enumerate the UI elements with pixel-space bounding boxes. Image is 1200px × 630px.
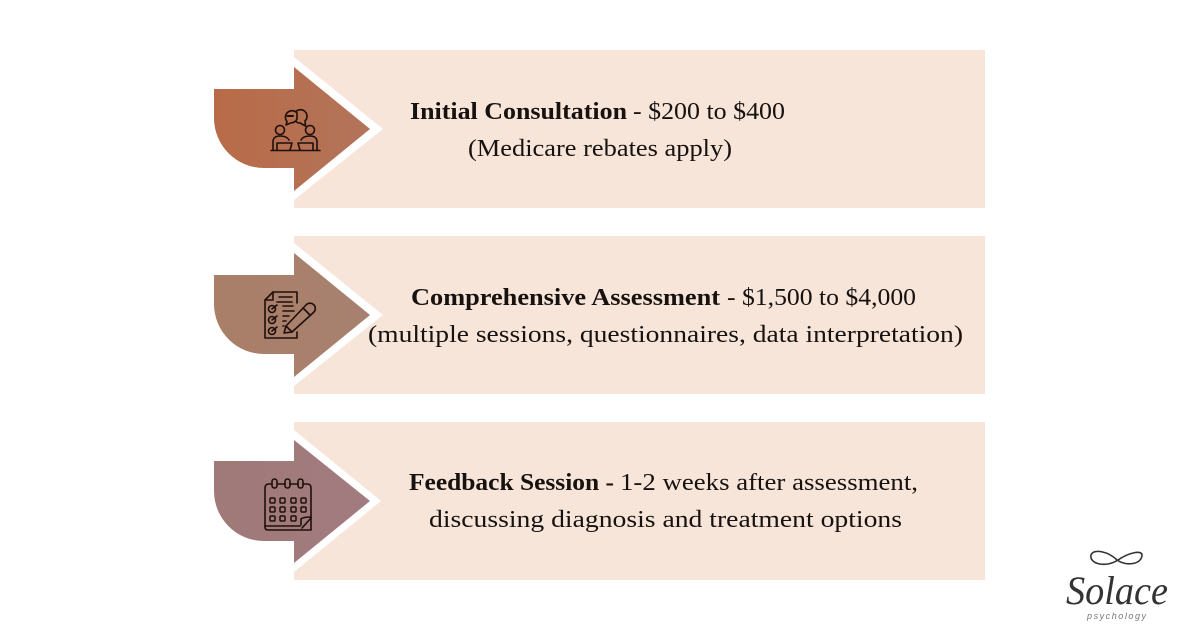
icon: calendar [265,479,311,530]
text: comprehensive assessment: (multiple sessions, questionnaires, data interpretation) [368,321,963,348]
logo tagline: psychology [1086,611,1146,621]
text: feedback session [409,469,918,533]
text: feedback session: Feedback Session - [409,469,614,496]
text: comprehensive assessment: Comprehensive Assessment [411,284,721,311]
logo wordmark: Solace [1066,568,1168,613]
text: comprehensive assessment: - $1,500 to $4,000 [727,284,916,311]
logo: Solace psychology [1066,551,1168,621]
text: comprehensive assessment [368,284,963,348]
icon: checklist and pencil [265,292,315,338]
arrow: comprehensive assessment [214,253,370,377]
text: feedback session: 1-2 weeks after assessment, [620,469,918,496]
icon: two people talking [271,110,320,150]
text: feedback session: discussing diagnosis and treatment options [429,506,902,533]
arrow: feedback session [214,440,370,563]
panel: comprehensive assessment [214,236,985,394]
arrow: initial consultation [214,67,370,191]
panel: feedback session [214,422,985,580]
text: initial consultation: - $200 to $400 [633,98,785,125]
text: initial consultation [410,98,785,162]
panel: initial consultation [214,50,985,208]
text: initial consultation: Initial Consultation [410,98,627,125]
icon: infinity symbol [1091,551,1142,564]
text: initial consultation: (Medicare rebates apply) [468,135,732,162]
